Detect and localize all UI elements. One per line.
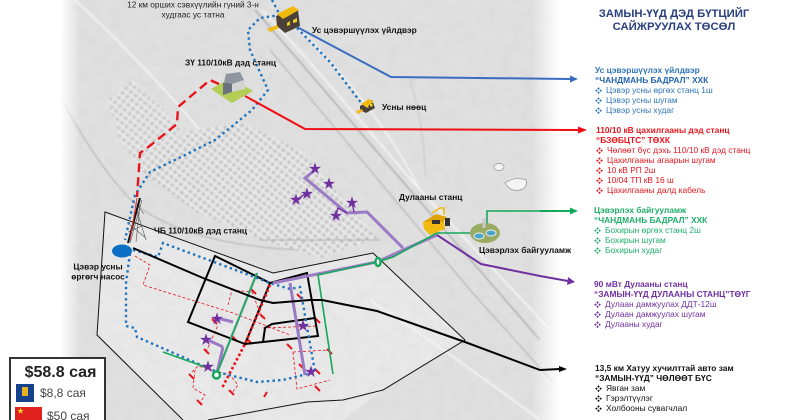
stars: heat substations: ★: [308, 161, 322, 176]
text block: water plant: ❖: [595, 108, 602, 115]
sewage line: green: [163, 211, 568, 374]
map labels: Дулааны станц: [399, 192, 463, 202]
text block: heat plant: 90 мВт Дулааны станц: [594, 279, 688, 289]
text block: water plant: Цэвэр усны өргөх станц 1ш: [606, 85, 713, 95]
title: САЙЖРУУЛАХ ТӨСӨЛ: [613, 21, 735, 33]
text block: water plant: ❖: [595, 88, 602, 95]
text block: road: ❖: [595, 396, 602, 403]
text block: power substation: 110/10 кВ цахилгааны дэд станц: [596, 125, 730, 135]
stars: heat substations: ★: [210, 311, 224, 326]
text block: road: Холбооны сувагчлал: [606, 403, 687, 413]
text block: power substation: ❖: [596, 188, 603, 195]
text block: heat plant: “ЗАМЫН-ҮҮД ДУЛААНЫ СТАНЦ”ТӨҮГ: [594, 289, 750, 299]
sewage pump markers: [213, 258, 380, 378]
text block: water plant: Ус цэвэршүүлэх үйлдвэр: [595, 65, 700, 75]
text block: heat plant: ❖: [594, 322, 601, 329]
text block: road: 13,5 км Хатуу хучилттай авто зам: [595, 363, 734, 373]
text block: sewage: “ЧАНДМАНЬ БАДРАЛ” ХХК: [594, 215, 707, 225]
text block: sewage: Бохирын шугам: [605, 235, 666, 245]
stars: heat substations: [199, 161, 359, 379]
icon: water reservoir: [356, 99, 375, 114]
map labels: Ус цэвэршүүлэх үйлдвэр: [312, 25, 417, 35]
text block: power substation: ❖: [596, 178, 603, 185]
water source note: [127, 0, 259, 20]
text block: heat plant: [594, 279, 750, 329]
stars: heat substations: ★: [304, 364, 318, 379]
text block: power substation: Цахилгааны далд кабель: [607, 185, 705, 195]
text block: power substation: ❖: [596, 148, 603, 155]
total funding: $58.8 сая: [25, 364, 96, 381]
map labels: Цэвэрлэх байгууламж: [479, 245, 571, 255]
text block: water plant: Цэвэр усны шугам: [606, 95, 678, 105]
text block: heat plant: Дулаан дамжуулах ДДТ-12ш: [605, 299, 717, 309]
main road: black arrow: [133, 248, 567, 372]
title: ЗАМЫН-ҮҮД ДЭД БҮТЦИЙГ: [599, 8, 749, 20]
lake: [494, 164, 526, 190]
text block: power substation: [596, 125, 750, 195]
power arrow: red: [245, 96, 587, 134]
thin red dashed network: [135, 256, 330, 403]
text block: heat plant: Дулааны худаг: [605, 319, 663, 329]
power line: thick dashed red: [137, 80, 219, 197]
icon: heat plant: [423, 208, 450, 235]
text block: sewage: ❖: [594, 228, 601, 235]
text block: road: ❖: [595, 386, 602, 393]
text block: power substation: 10 кВ РП 2ш: [607, 165, 656, 175]
water line: dotted blue: [125, 0, 362, 382]
text block: power substation: Чөлөөт бүс дэхь 110/10 кВ дэд станц: [607, 145, 750, 155]
stars: heat substations: ★: [289, 192, 303, 207]
text block: heat plant: Дулаан дамжуулах шугам: [605, 309, 705, 319]
icon: China flag: ★: [17, 408, 24, 415]
text block: sewage: ❖: [594, 238, 601, 245]
aerial map background: [55, 0, 565, 420]
text block: road: [595, 363, 734, 413]
power line: dotted red: [222, 285, 270, 388]
text block: sewage: Цэвэрлэх байгууламж: [594, 205, 686, 215]
text block: road: Гэрэлтүүлэг: [606, 393, 653, 403]
text block: power substation: ❖: [596, 168, 603, 175]
zone boundary: [97, 212, 465, 420]
stars: heat substations: ★: [201, 359, 215, 374]
sewage arrow: green: [540, 208, 578, 214]
icon: water treatment plant: [267, 6, 300, 33]
icon: substation building: [211, 72, 253, 103]
map labels: өргөгч насос: [71, 272, 125, 282]
heating line: purple: [206, 170, 437, 375]
text block: sewage: [594, 205, 708, 255]
text block: sewage: ❖: [594, 248, 601, 255]
text block: heat plant: ❖: [594, 302, 601, 309]
road network: thick black blocks: [188, 256, 318, 344]
stars: heat substations: ★: [345, 195, 359, 210]
text block: power substation: Цахилгааны агаарын шугам: [607, 155, 716, 165]
text block: road: Явган зам: [606, 383, 645, 393]
heat arrow: purple: [437, 235, 575, 285]
red transformer markers: [189, 289, 332, 405]
icon: sewage treatment plant: [470, 218, 500, 243]
stars: heat substations: ★: [329, 208, 343, 223]
text block: power substation: “БЗӨБЦТС” ТӨХК: [596, 135, 670, 145]
stars: heat substations: ★: [300, 186, 314, 201]
Mongolia amount: $8,8 сая: [40, 386, 86, 400]
title: [599, 7, 750, 33]
icon: water pump: [112, 244, 132, 258]
map labels: Цэвэр усны: [73, 262, 123, 272]
text block: heat plant: ❖: [594, 312, 601, 319]
text block: water plant: Цэвэр усны худаг: [606, 105, 674, 115]
icon: Mongolian emblem: [16, 384, 34, 402]
stars: heat substations: ★: [296, 318, 310, 333]
text block: road: “ЗАМЫН-ҮҮД” ЧӨЛӨӨТ БҮС: [595, 373, 712, 383]
map labels: [71, 25, 571, 282]
text block: power substation: ❖: [596, 158, 603, 165]
icon: transmission tower: [128, 198, 146, 243]
stars: heat substations: ★: [199, 332, 213, 347]
water arrow: blue: [297, 27, 578, 82]
text block: water plant: ❖: [595, 98, 602, 105]
icon: China flag: [15, 407, 42, 420]
map with annotations: [63, 0, 587, 420]
text block: water plant: “ЧАНДМАНЬ БАДРАЛ” ХХК: [595, 75, 708, 85]
water source note: худгаас ус татна: [161, 10, 225, 20]
text block: power substation: 10/04 ТП кВ 16 ш: [607, 175, 674, 185]
map labels: ЧБ 110/10кВ дэд станц: [154, 226, 248, 236]
text block: sewage: Бохирын худаг: [605, 245, 662, 255]
funding legend: [9, 357, 106, 420]
stars: heat substations: ★: [322, 176, 336, 191]
map labels: Усны нөөц: [382, 102, 427, 112]
text block: road: ❖: [595, 406, 602, 413]
text block: water plant: [595, 65, 713, 115]
text block: sewage: Бохирын өргөх станц 2ш: [605, 225, 701, 235]
map labels: ЗҮ 110/10кВ дэд станц: [185, 58, 277, 68]
